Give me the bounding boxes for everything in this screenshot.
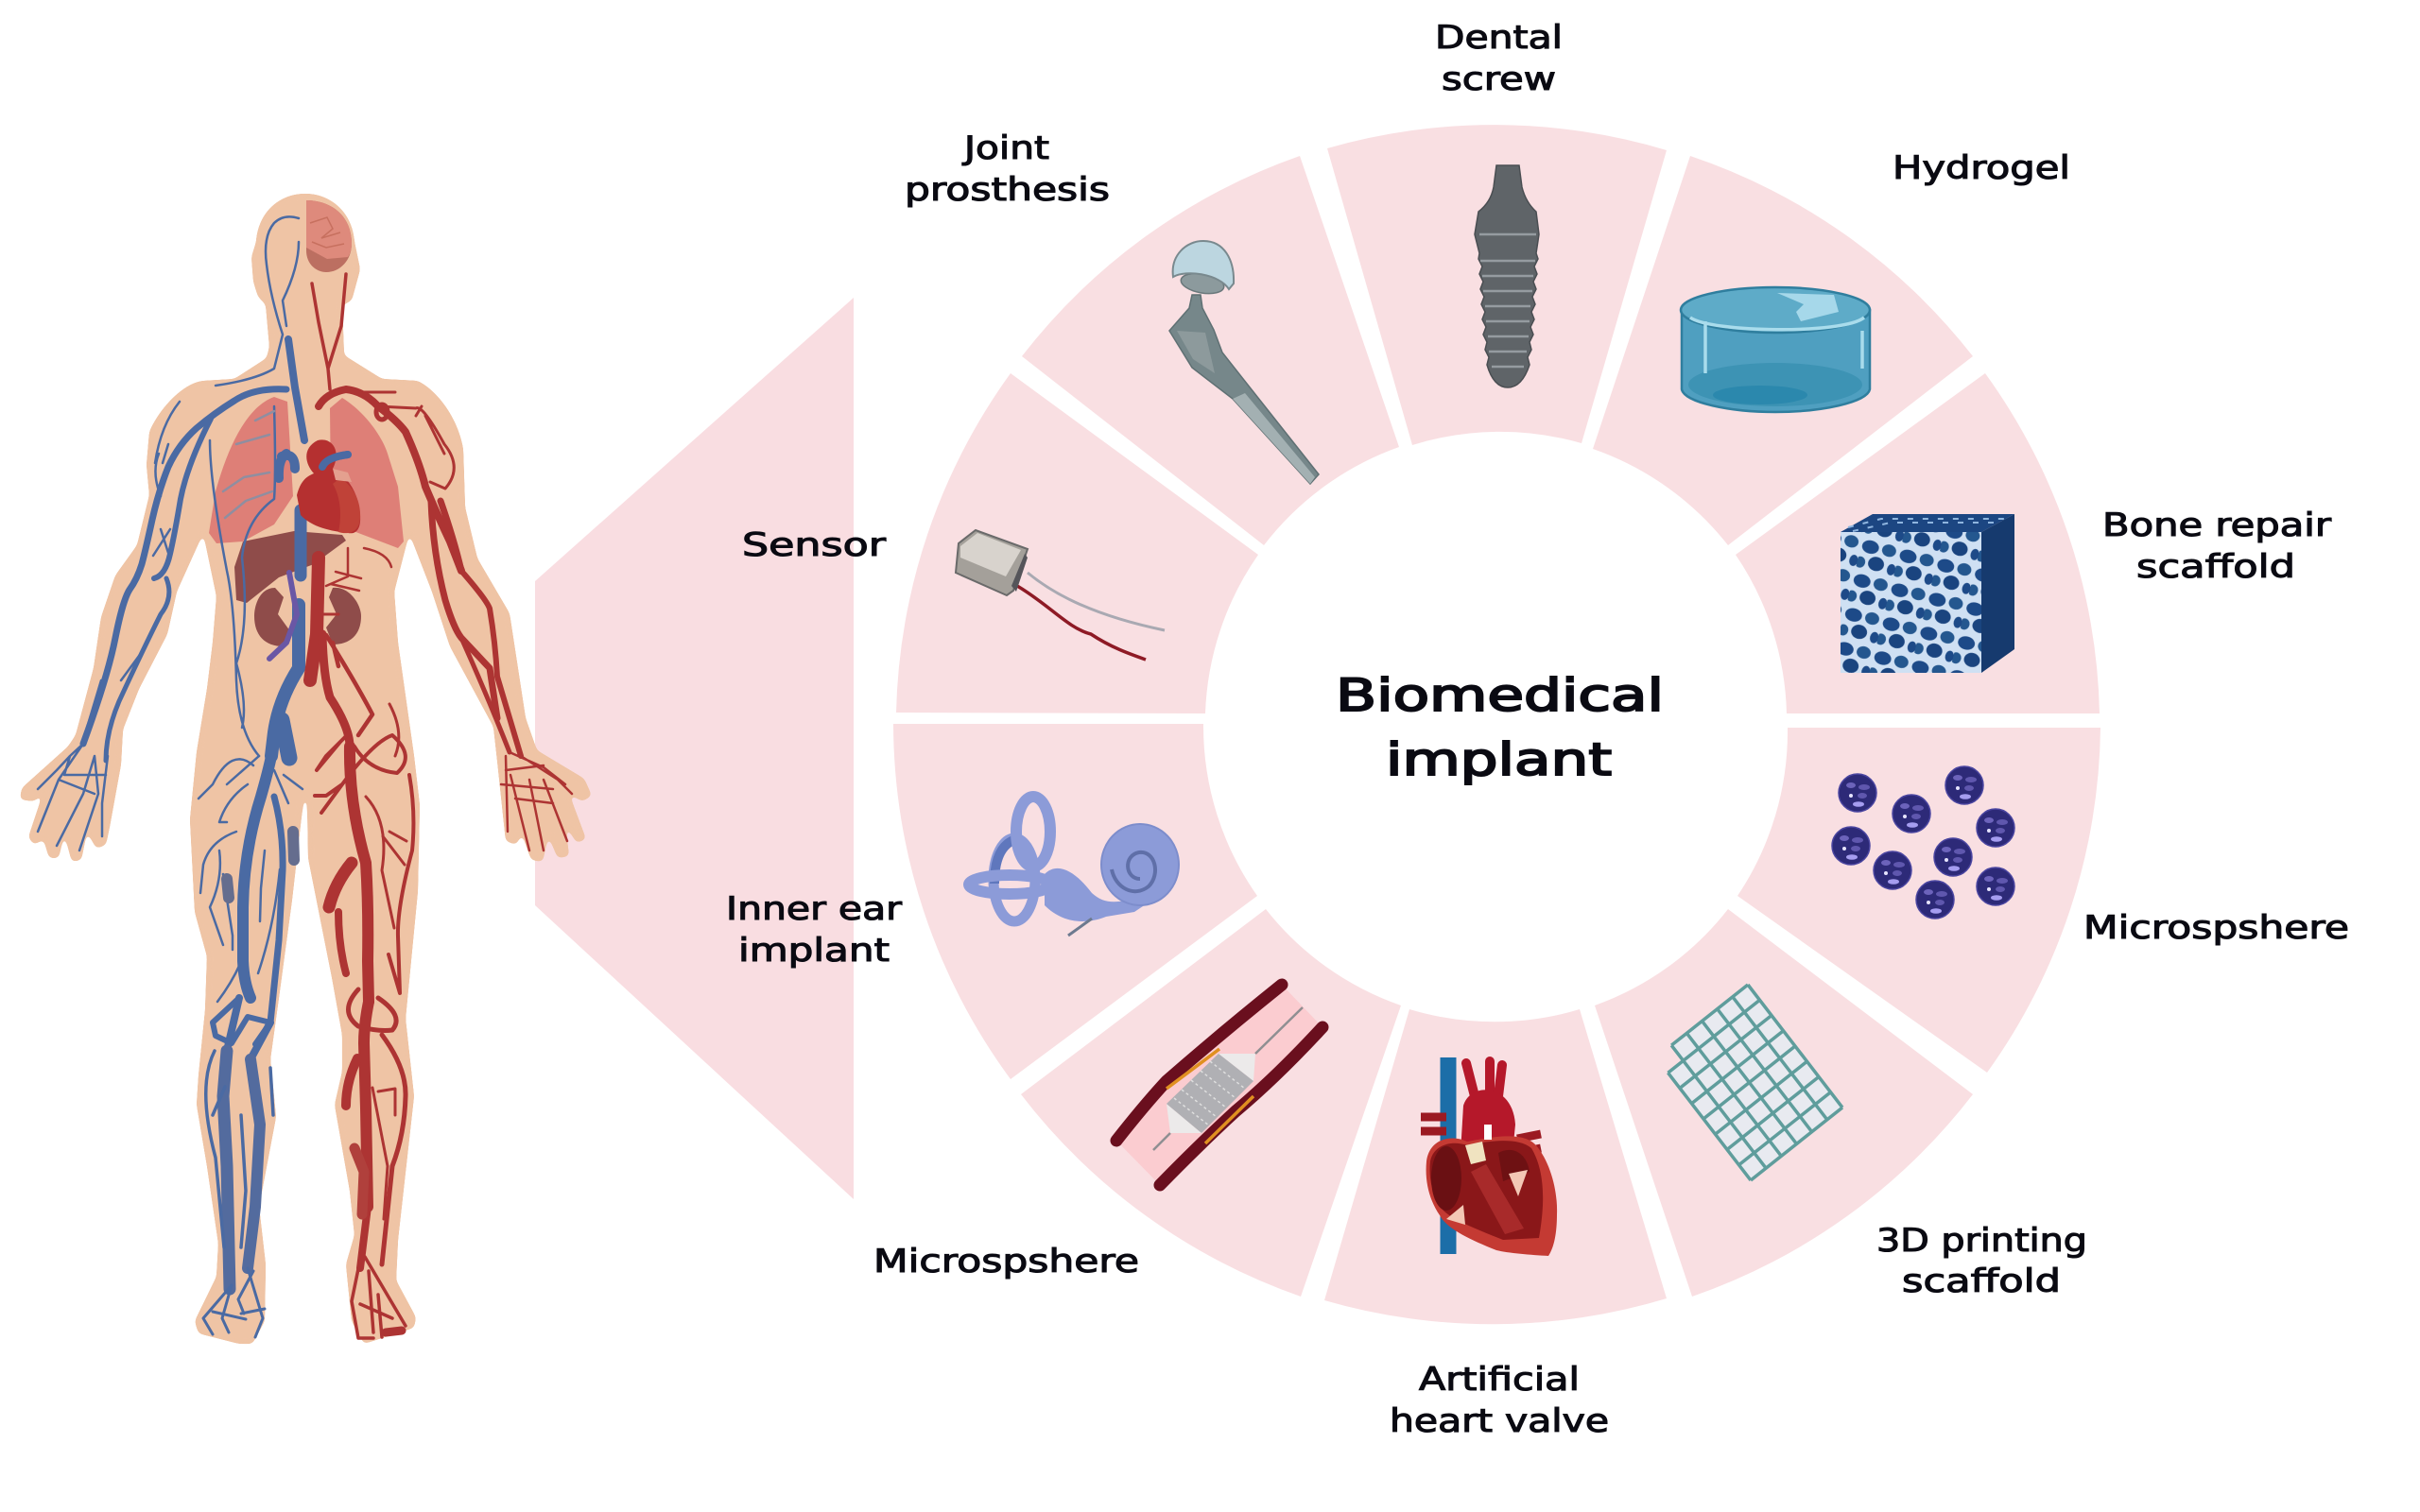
label: Joint prosthesis: Joint: [962, 129, 1049, 167]
label: Bone repair scaffold: Bone repair: [2102, 507, 2331, 544]
label: Artificial heart valve: [1390, 1361, 1609, 1440]
label: Sensor: Sensor: [742, 526, 886, 564]
panel: enlargement wedge: [535, 298, 854, 1199]
label: Bone repair scaffold: [2102, 507, 2331, 586]
icon: printed mesh: [1656, 985, 1842, 1180]
heading: Biomedical implant: [1336, 670, 1664, 786]
label: Inner ear implant: [726, 890, 902, 970]
arteries (red): [310, 274, 572, 1338]
icon: dental screw: [1475, 165, 1539, 387]
heading: Biomedical implant: Biomedical: [1336, 670, 1664, 722]
segment: bone repair scaffold: [1736, 373, 2100, 713]
segment: inner ear implant: [893, 724, 1257, 1079]
body silhouette: [20, 194, 592, 1344]
heart: [297, 439, 360, 533]
brain: [306, 200, 352, 272]
icon: inner ear: [969, 797, 1179, 936]
label: Microspshere right: Microspshere: [2083, 909, 2349, 947]
icon: microspheres: [1832, 766, 2014, 919]
segment: joint prosthesis: [1022, 156, 1399, 545]
label: Inner ear implant: implant: [738, 932, 890, 970]
icon: anatomical heart: [1421, 1057, 1557, 1256]
icon: hydrogel disc: [1681, 287, 1870, 412]
label: 3D printing scaffold: scaffold: [1902, 1263, 2061, 1300]
label: Dental screw: Dental: [1435, 19, 1563, 57]
label: Dental screw: [1435, 19, 1563, 98]
purple vessel: [269, 573, 297, 659]
label: Joint prosthesis: [905, 129, 1110, 209]
lungs: [209, 397, 404, 548]
label: Joint prosthesis: prosthesis: [905, 171, 1110, 209]
label: Inner ear implant: Inner ear: [726, 890, 902, 928]
liver: [234, 531, 346, 603]
segment: artificial heart valve: [1324, 1009, 1667, 1324]
label: Microspshere left: Microspshere: [873, 1243, 1139, 1280]
heading: Biomedical implant: implant: [1386, 734, 1612, 786]
segment: 3D printing scaffold: [1595, 909, 1973, 1297]
segment: hydrogel: [1593, 156, 1973, 545]
label: 3D printing scaffold: [1876, 1222, 2087, 1300]
label: Bone repair scaffold: scaffold: [2136, 548, 2295, 586]
panel: implant wheel: [893, 125, 2100, 1324]
kidneys: [254, 588, 361, 646]
label: Artificial heart valve: heart valve: [1390, 1402, 1609, 1440]
label: 3D printing scaffold: 3D printing: [1876, 1222, 2087, 1260]
segment: microsphere right: [1737, 728, 2100, 1073]
icon: porous scaffold cube: [1841, 514, 2014, 673]
label: Hydrogel: Hydrogel: [1893, 149, 2070, 187]
segment: stent: [1021, 909, 1401, 1297]
icon: sensor with wires: [956, 530, 1165, 660]
segment: sensor: [896, 373, 1258, 713]
label: Dental screw: screw: [1442, 60, 1556, 98]
icon: stent in vessel: [1116, 985, 1322, 1185]
veins (blue): [38, 216, 348, 1337]
human body with circulatory system: [20, 194, 592, 1344]
icon: hip prosthesis: [1169, 241, 1319, 484]
segment: dental screw: [1327, 125, 1667, 445]
label: Artificial heart valve: Artificial: [1419, 1361, 1580, 1399]
